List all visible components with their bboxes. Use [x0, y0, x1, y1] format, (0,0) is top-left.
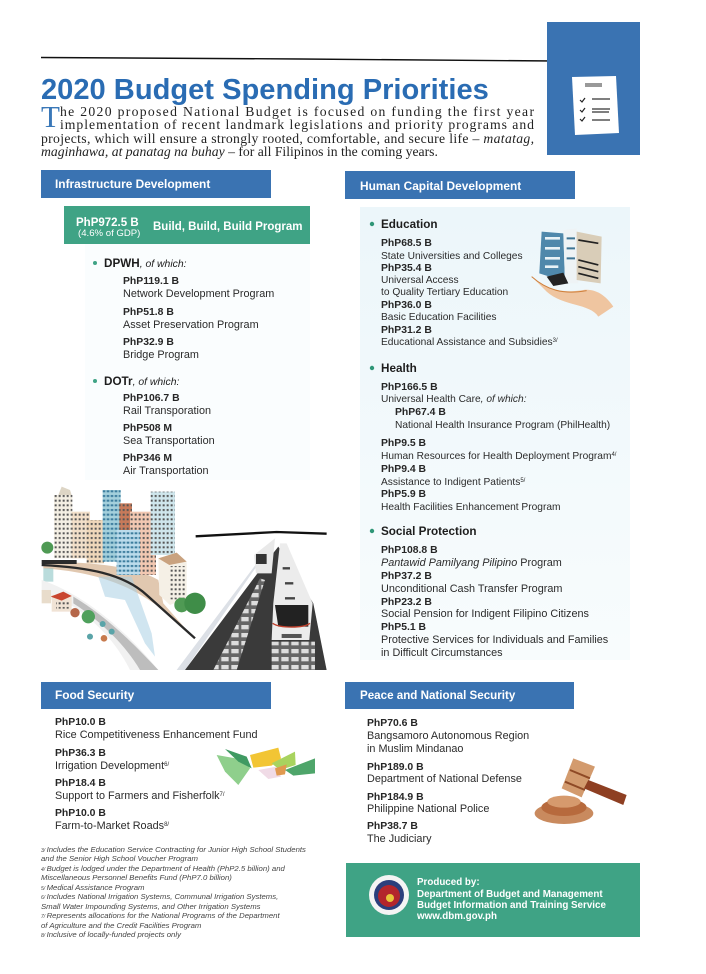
credits box: Department of Budget and Management: [417, 889, 603, 900]
list: DOTr: Air Transportation: [123, 465, 209, 477]
footnotes: 5/ Medical Assistance Program: [41, 883, 145, 892]
icon: buildings on a hand: [532, 228, 613, 317]
list: food security items: Farm-to-Market Roads: [55, 820, 164, 832]
list: peace and security items: Department of National Defense: [367, 773, 522, 785]
list: health: Health: [381, 362, 417, 375]
list: food security items: PhP18.4 B: [55, 778, 106, 789]
list: DOTr: PhP106.7 B: [123, 393, 180, 404]
top rule: [41, 58, 555, 61]
list: peace and security items: PhP38.7 B: [367, 821, 418, 832]
list: DPWH: [93, 257, 274, 361]
list: education: [370, 218, 558, 348]
list: social protection: Unconditional Cash Transfer Program: [381, 583, 562, 595]
intro text: implementation of recent landmark legislations and priority programs and: [60, 117, 534, 132]
intro text: projects, which will ensure a strongly rooted, comfortable, and secure life – matatag,: [41, 131, 534, 146]
footnotes: 3/ Includes the Education Service Contracting for Junior High School Students: [41, 845, 306, 854]
footnotes: 8/ Inclusive of locally-funded projects only: [41, 930, 182, 939]
banner: build build build: [64, 206, 310, 244]
list: health: PhP9.4 B: [381, 464, 427, 475]
list: education: Educational Assistance and Subsidies: [381, 337, 553, 348]
list: health: National Health Insurance Program (PhilHealth): [395, 420, 610, 431]
panel: human capital development: [345, 171, 630, 660]
panel: peace and national security: [345, 682, 627, 845]
list: health: PhP5.9 B: [381, 489, 427, 500]
list: health: 5/: [520, 478, 526, 484]
banner: build build build: PhP972.5 B: [76, 217, 139, 229]
list: peace and security items: Philippine National Police: [367, 803, 489, 815]
footnotes: [41, 845, 306, 939]
panel: infrastructure development: [41, 170, 327, 670]
list: food security items: Rice Competitiveness Enhancement Fund: [55, 729, 258, 741]
list: social protection: [370, 525, 609, 659]
list: food security items: 8/: [164, 822, 169, 828]
list: DPWH: PhP119.1 B: [123, 276, 180, 287]
list: health: Human Resources for Health Deployment Program: [381, 451, 611, 462]
list: education: State Universities and Colleges: [381, 251, 523, 262]
list: peace and security items: Bangsamoro Autonomous Region: [367, 730, 529, 742]
list: social protection: PhP37.2 B: [381, 571, 432, 582]
list: peace and security items: in Muslim Mindanao: [367, 743, 463, 755]
banner: build build build: (4.6% of GDP): [78, 228, 140, 239]
intro text: maginhawa, at panatag na buhay – for all Filipinos in the coming years.: [41, 144, 438, 159]
list: social protection: PhP108.8 B: [381, 545, 438, 556]
footnotes: 4/ Budget is lodged under the Department of Health (PhP2.5 billion) and: [41, 864, 286, 873]
list: social protection: in Difficult Circumstances: [381, 647, 503, 659]
list: health: PhP67.4 B: [395, 407, 446, 418]
intro text: T: [41, 99, 60, 134]
list: education: PhP35.4 B: [381, 263, 432, 274]
list: DPWH: DPWH, of which:: [104, 257, 187, 270]
footnotes: 6/ Includes National Irrigation Systems, Communal Irrigation Systems,: [41, 892, 278, 901]
list: social protection: Social Protection: [381, 525, 476, 538]
list: peace and security items: PhP70.6 B: [367, 718, 418, 729]
list: education: PhP31.2 B: [381, 325, 432, 336]
footnotes: 7/ Represents allocations for the National Programs of the Department: [41, 911, 280, 920]
list: education: Universal Access: [381, 275, 459, 286]
list: DOTr: Sea Transportation: [123, 435, 215, 447]
list: health: 4/: [611, 452, 617, 458]
list: DOTr: PhP346 M: [123, 453, 172, 464]
list: food security items: PhP36.3 B: [55, 748, 106, 759]
list: health: PhP9.5 B: [381, 438, 427, 449]
sub: elevated rail: [196, 532, 327, 536]
panel: food security: [41, 682, 315, 832]
heading: peace and national security: Peace and National Security: [360, 689, 516, 702]
heading: food security: Food Security: [55, 688, 135, 702]
heading: human capital development: [345, 171, 575, 199]
list: health: [370, 362, 617, 513]
icon: gavel: [535, 758, 627, 824]
list: social protection: PhP5.1 B: [381, 622, 427, 633]
list: DPWH: Network Development Program: [123, 288, 274, 300]
list: social protection: Social Pension for Indigent Filipino Citizens: [381, 608, 590, 620]
list: DPWH: PhP51.8 B: [123, 307, 174, 318]
list: DOTr: Rail Transporation: [123, 405, 211, 417]
list: education: to Quality Tertiary Education: [381, 287, 508, 298]
panel background: [360, 207, 630, 660]
panel background: [85, 244, 310, 480]
footnotes: Miscellaneous Personnel Benefits Fund (PhP7.0 billion): [41, 873, 232, 882]
icon: DBM seal: [369, 875, 409, 915]
list: DOTr: [93, 375, 215, 477]
footnotes: of Agriculture and the Credit Facilities Program: [41, 921, 202, 930]
footnotes: Small Water Impounding Systems, and Other Irrigation Systems: [41, 902, 261, 911]
title: 2020 Budget Spending Priorities: [41, 74, 489, 106]
credits box: Budget Information and Training Service: [417, 900, 606, 911]
list: health: Health Facilities Enhancement Program: [381, 502, 560, 513]
list: DOTr: DOTr, of which:: [104, 375, 179, 388]
illustration: city and rail: [41, 487, 327, 670]
list: DPWH: Asset Preservation Program: [123, 319, 259, 331]
banner: build build build: Build, Build, Build Program: [153, 221, 302, 233]
list: DPWH: PhP32.9 B: [123, 337, 174, 348]
list: DPWH: Bridge Program: [123, 349, 199, 361]
credits box: [346, 863, 640, 937]
list: health: PhP166.5 B: [381, 382, 438, 393]
heading: infrastructure development: [41, 170, 271, 198]
list: food security items: PhP10.0 B: [55, 808, 106, 819]
credits box: Produced by:: [417, 877, 480, 888]
list: health: Assistance to Indigent Patients: [381, 477, 520, 488]
intro text: [41, 99, 534, 159]
footnotes: and the Senior High School Voucher Program: [41, 854, 199, 863]
list: DOTr: PhP508 M: [123, 423, 172, 434]
list: education: PhP68.5 B: [381, 238, 432, 249]
list: peace and security items: PhP184.9 B: [367, 792, 424, 803]
list: social protection: PhP23.2 B: [381, 597, 432, 608]
list: food security items: [55, 717, 258, 832]
list: education: Basic Education Facilities: [381, 312, 497, 323]
list: social protection: Pantawid Pamilyang Pilipino Program: [381, 557, 562, 569]
list: food security items: Support to Farmers and Fisherfolk: [55, 790, 220, 802]
list: peace and security items: The Judiciary: [367, 833, 432, 845]
heading: human capital development: Human Capital Development: [360, 179, 521, 193]
intro text: he 2020 proposed National Budget is focused on funding the first year: [60, 104, 534, 119]
list: health: Universal Health Care, of which:: [381, 394, 527, 405]
heading: food security: [41, 682, 271, 709]
list: food security items: PhP10.0 B: [55, 717, 106, 728]
list: peace and security items: PhP189.0 B: [367, 762, 424, 773]
heading: infrastructure development: Infrastructure Development: [55, 177, 210, 191]
list: education: Education: [381, 218, 438, 231]
icon: checklist on blue tab: [547, 22, 640, 155]
list: peace and security items: [367, 718, 529, 845]
list: education: PhP36.0 B: [381, 300, 432, 311]
list: food security items: 7/: [220, 792, 225, 798]
list: education: 3/: [553, 338, 558, 344]
credits box: www.dbm.gov.ph: [416, 911, 497, 922]
list: food security items: Irrigation Development: [55, 760, 164, 772]
icon: vegetables: [217, 748, 315, 785]
list: food security items: 6/: [164, 762, 169, 768]
heading: peace and national security: [345, 682, 574, 709]
list: social protection: Protective Services for Individuals and Families: [381, 634, 609, 646]
